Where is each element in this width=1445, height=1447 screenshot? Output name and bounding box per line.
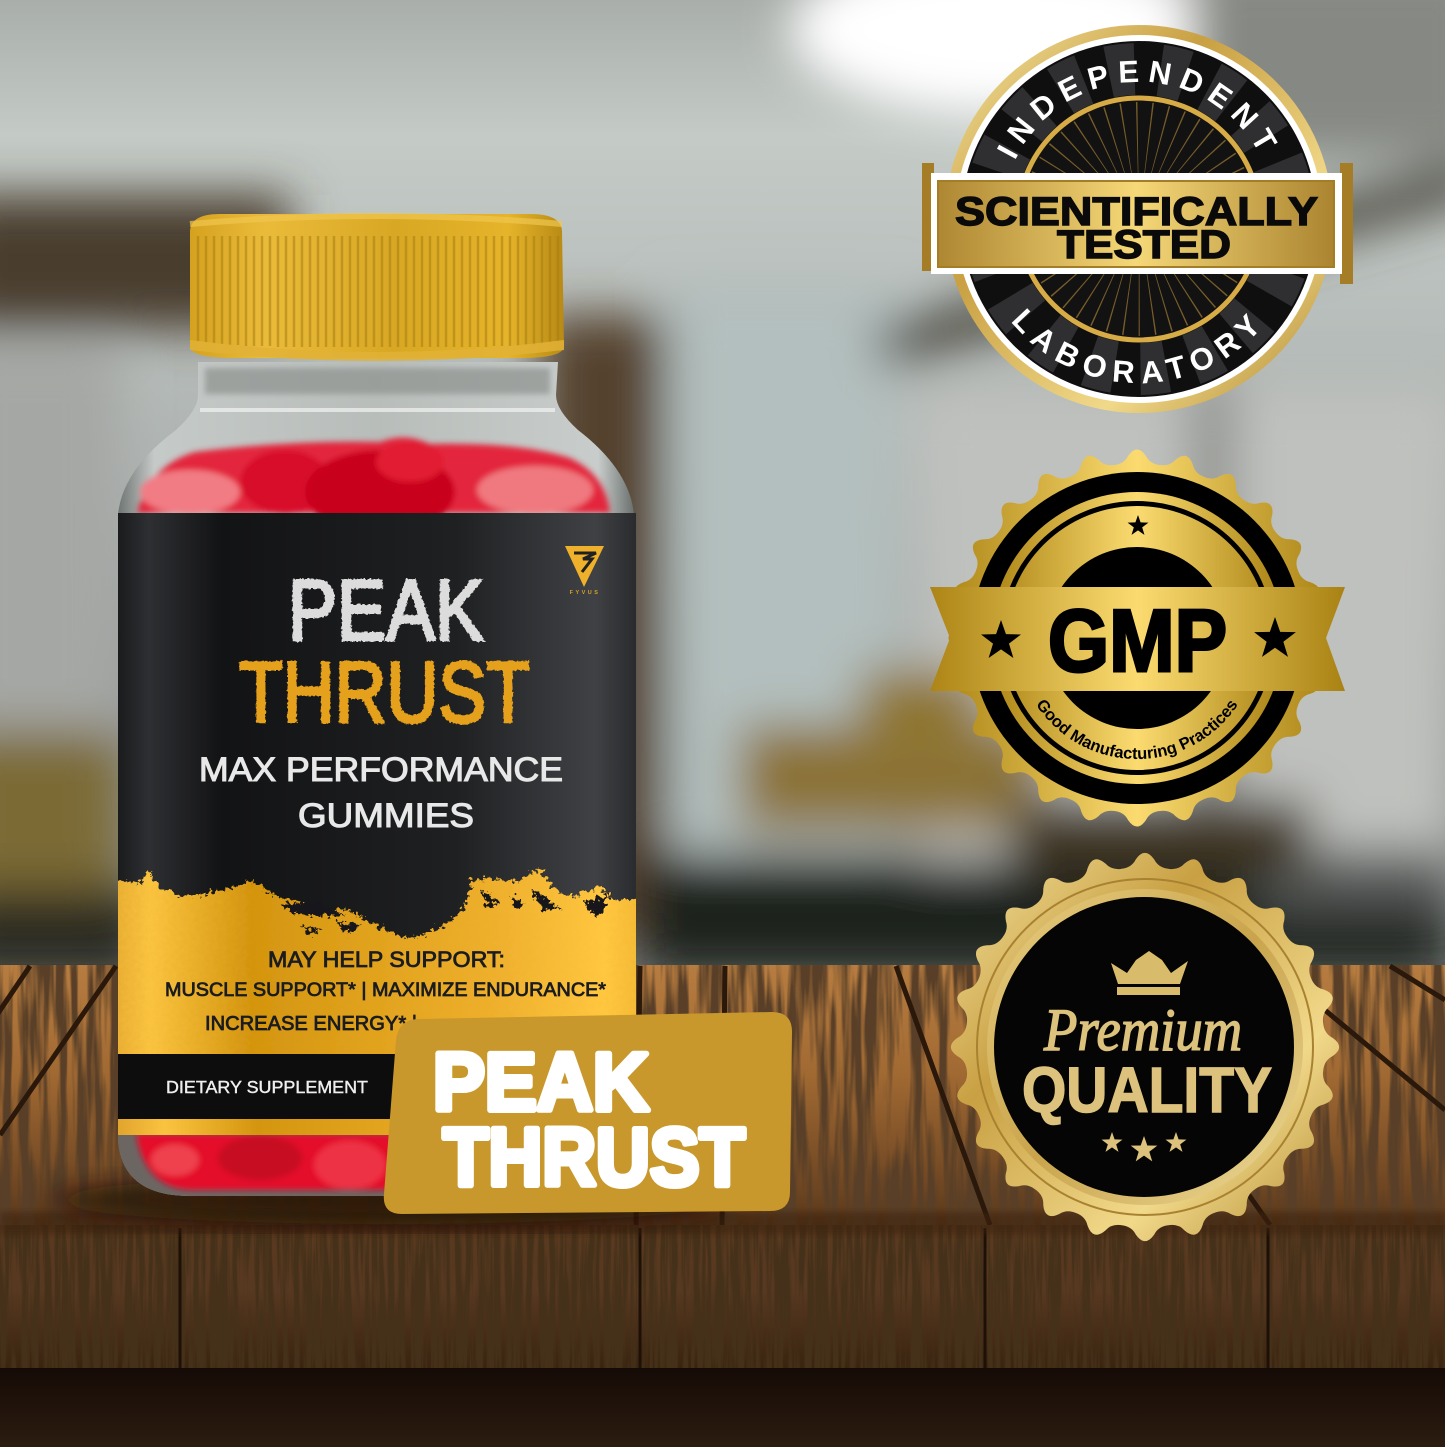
name: PEAK: PEAK xyxy=(288,563,484,659)
brand logo xyxy=(565,546,604,596)
benefits text xyxy=(165,947,607,1035)
product label xyxy=(100,513,660,1135)
name: THRUST: THRUST xyxy=(239,645,530,741)
blurred room background xyxy=(0,0,1445,980)
premium quality text: QUALITY xyxy=(1022,1054,1272,1126)
top star xyxy=(1128,515,1148,535)
glass jar xyxy=(118,362,634,1196)
dietary supplement: DIETARY SUPPLEMENT xyxy=(166,1077,368,1097)
ribbon xyxy=(930,587,1345,691)
table top surface xyxy=(0,965,1445,1230)
gold cap xyxy=(190,214,564,361)
curved motto: Good Manufacturing Practices xyxy=(1038,700,1237,760)
crown icon xyxy=(1111,951,1188,995)
brand logo: FYVUS xyxy=(570,590,600,596)
red gummies top xyxy=(137,437,610,534)
badge: independent laboratory scientifically tested xyxy=(922,25,1353,413)
badge ring text xyxy=(997,60,1278,384)
supplement bottle xyxy=(100,214,660,1196)
badge: premium quality xyxy=(944,846,1346,1248)
ribbon xyxy=(922,163,1353,284)
table front edge xyxy=(0,1212,1445,1372)
subtitle xyxy=(199,751,563,835)
card text: THRUST xyxy=(443,1112,745,1203)
black lower band xyxy=(118,1054,418,1120)
subtitle: GUMMIES xyxy=(298,797,474,835)
benefits text: INCREASE ENERGY* | xyxy=(205,1013,417,1035)
ribbon: SCIENTIFICALLY xyxy=(955,190,1318,234)
card text: PEAK xyxy=(433,1037,649,1128)
card text xyxy=(433,1037,745,1203)
ribbon: GMP xyxy=(1048,591,1227,690)
gold name card xyxy=(384,1012,792,1214)
premium quality text xyxy=(1022,997,1272,1126)
premium quality text: Premium xyxy=(1043,997,1242,1063)
three stars xyxy=(1102,1132,1186,1161)
subtitle: MAX PERFORMANCE xyxy=(199,751,563,789)
bottle shadow xyxy=(50,1176,730,1224)
badge ring text: LABORATORY xyxy=(1012,308,1257,384)
benefits text: MAY HELP SUPPORT: xyxy=(268,947,505,972)
benefits text: MUSCLE SUPPORT* | MAXIMIZE ENDURANCE* xyxy=(165,980,607,1001)
yellow torn band xyxy=(118,868,636,1054)
red gummies bottom xyxy=(136,1134,400,1190)
table underside shadow xyxy=(0,1368,1445,1447)
badge ring text: INDEPENDENT xyxy=(997,60,1278,159)
wooden table xyxy=(0,965,1445,1447)
ribbon: TESTED xyxy=(1057,223,1231,267)
badge: GMP xyxy=(930,450,1345,826)
